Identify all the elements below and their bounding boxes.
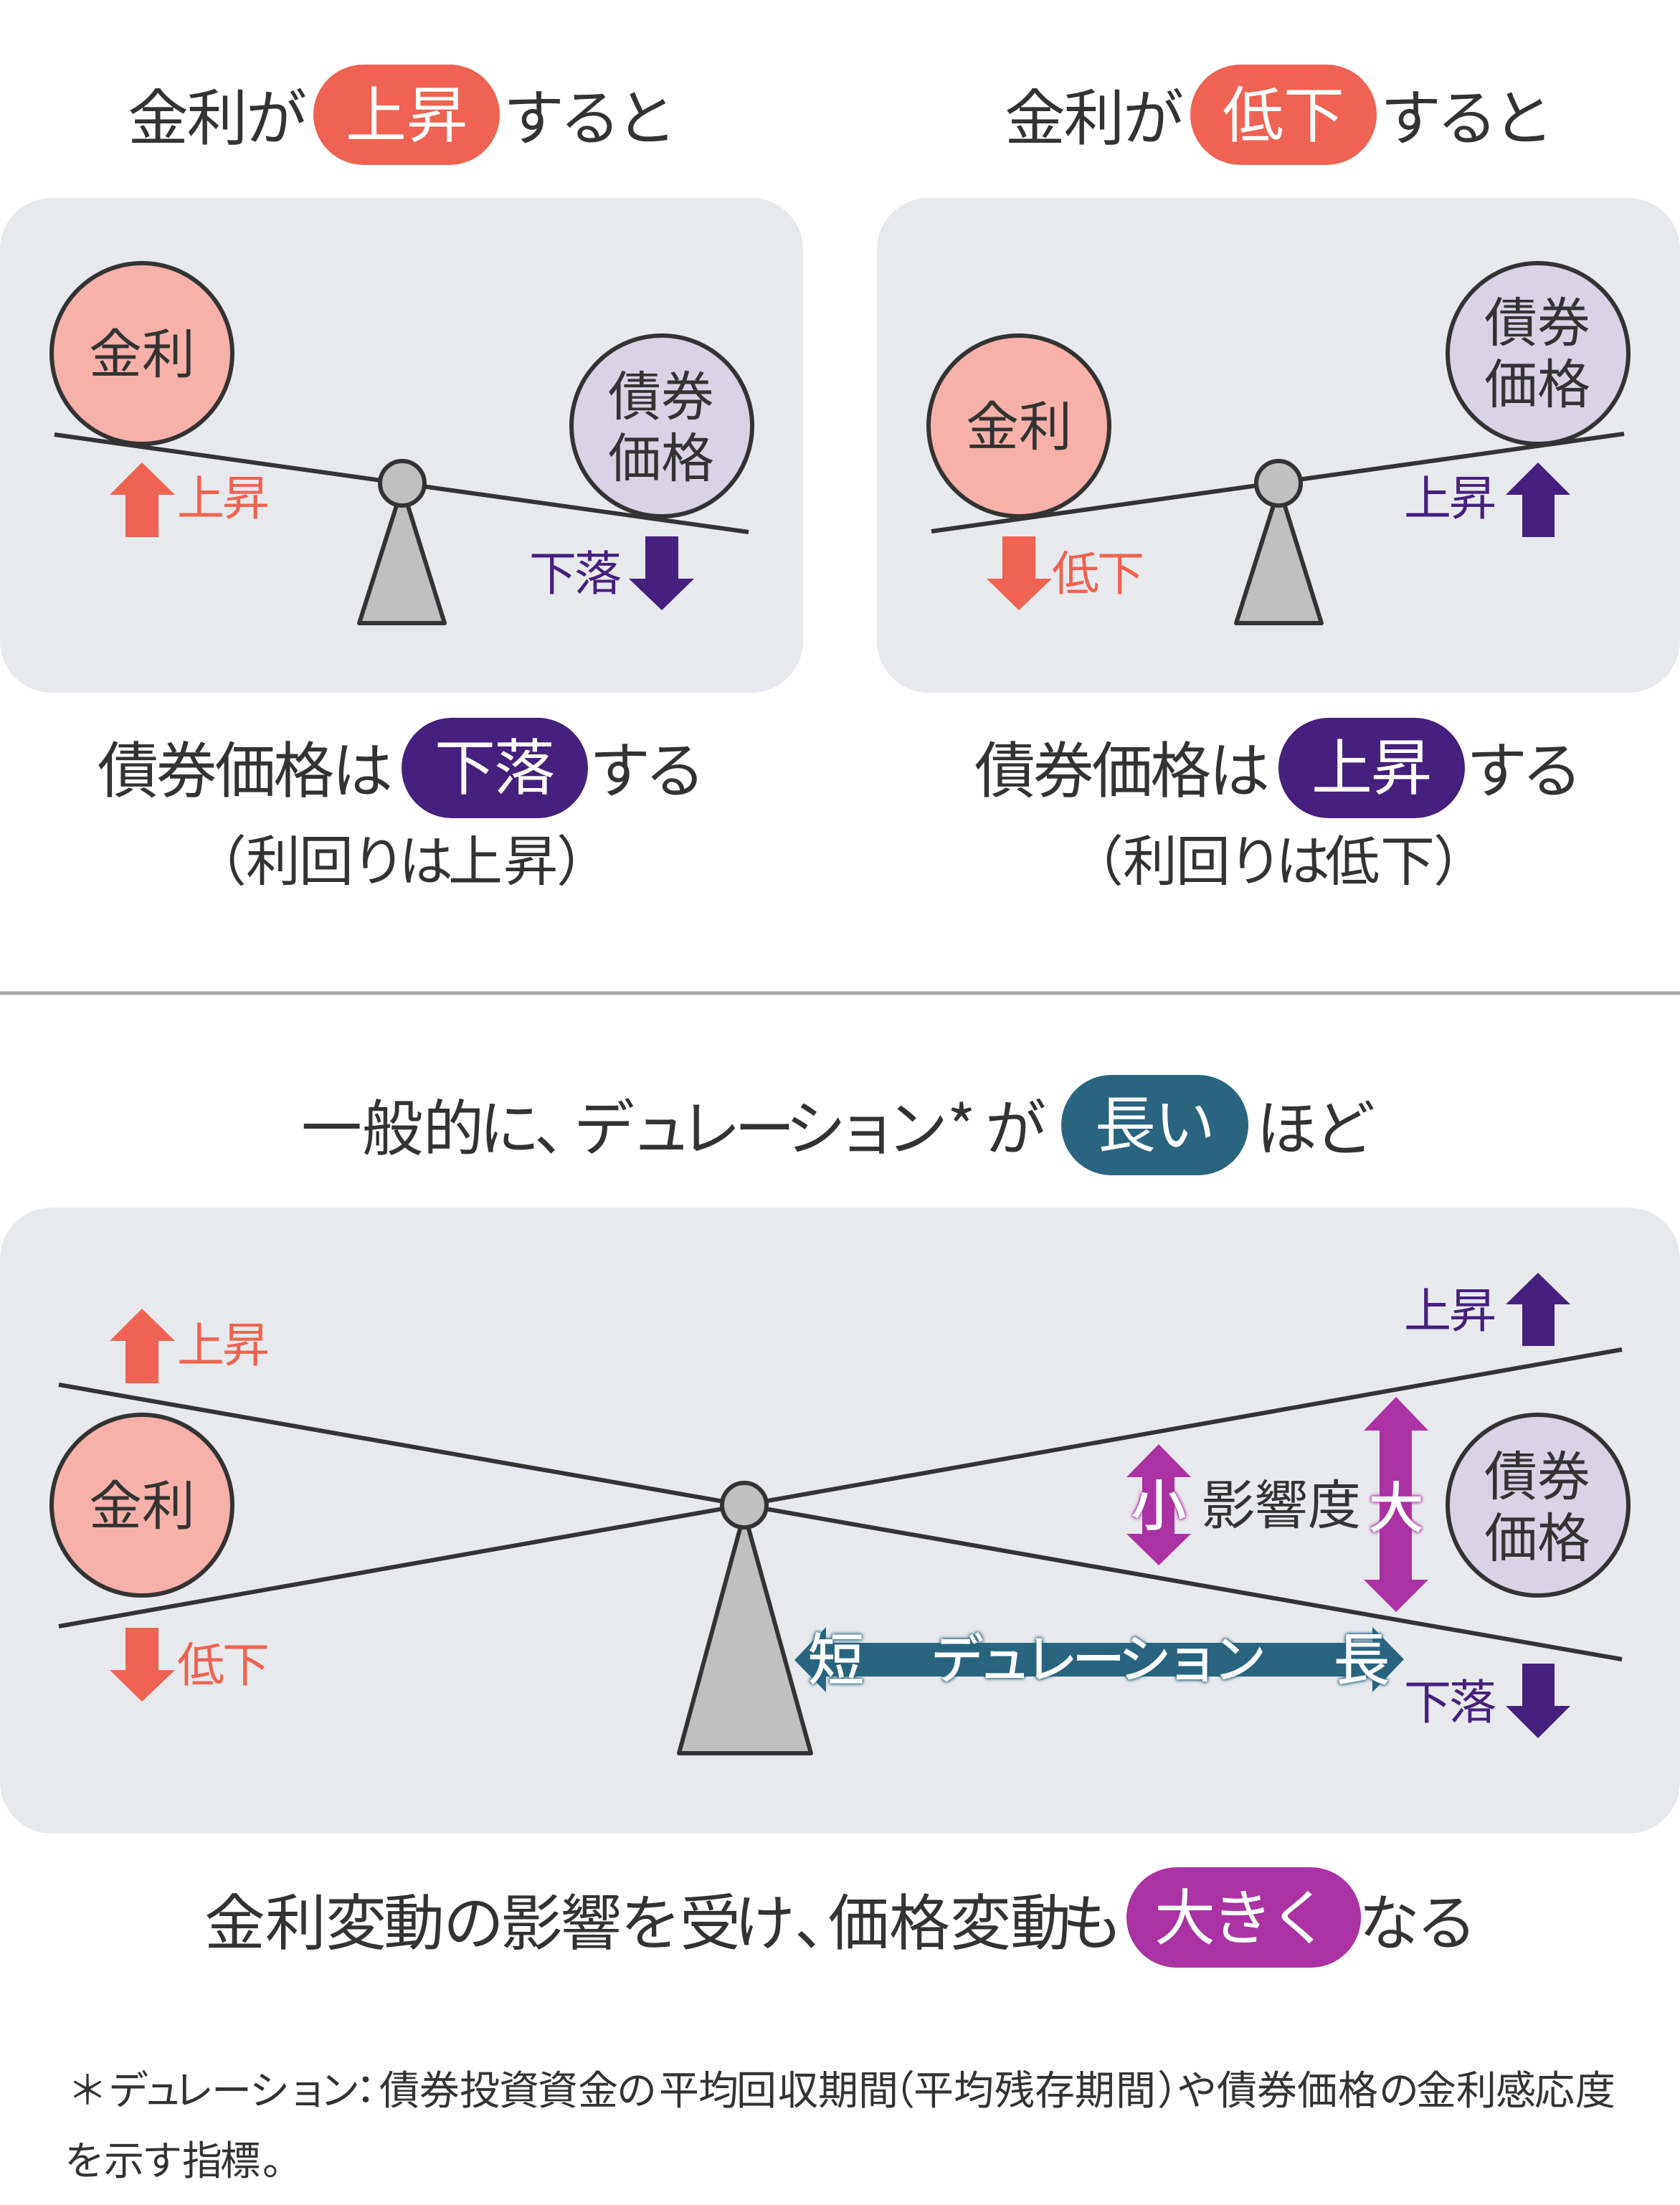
arrow: purple up bbox=[1506, 463, 1570, 537]
arrow: purple down bbox=[629, 536, 694, 610]
footnote: を示す指標。 bbox=[65, 2129, 303, 2187]
circle: bond price bbox=[1448, 263, 1628, 444]
circle: interest rate: 金利 bbox=[89, 312, 195, 389]
arrow: duration bbox=[794, 1616, 1404, 1696]
pill: rise bbox=[313, 65, 500, 165]
result: bond price rises: 債券価格は bbox=[974, 722, 1270, 810]
arrow: red down bbox=[110, 1628, 175, 1702]
note: yield rises: （利回りは上昇） bbox=[192, 817, 611, 896]
conclusion heading bbox=[204, 1867, 1477, 1968]
pill: larger bbox=[1126, 1867, 1361, 1968]
pivot bbox=[380, 461, 424, 506]
arrow: duration: デュレーション bbox=[931, 1617, 1266, 1694]
arrow: red up bbox=[110, 463, 175, 537]
circle: interest rate: 金利 bbox=[89, 1464, 195, 1540]
beam: lower-left to upper-right bbox=[59, 1350, 1622, 1626]
result: bond price rises bbox=[974, 718, 1582, 818]
circle: bond price bbox=[571, 336, 752, 516]
pill: long: 長い bbox=[1095, 1076, 1215, 1165]
pivot bbox=[1256, 461, 1301, 506]
circle: interest rate bbox=[929, 336, 1109, 516]
pill: fall: 下落 bbox=[435, 719, 555, 807]
circle: bond price: 価格 bbox=[1484, 1496, 1590, 1573]
beam bbox=[54, 435, 749, 532]
pill: rise: 上昇 bbox=[346, 67, 468, 155]
heading: rates fall: 金利が bbox=[1005, 70, 1184, 158]
pill: larger: 大きく bbox=[1154, 1869, 1330, 1958]
label: fall: 下落 bbox=[1404, 1664, 1496, 1733]
arrow: large impact: 大 bbox=[1369, 1464, 1423, 1543]
footnote: ＊デュレーション：債券投資資金の平均回収期間（平均残存期間）や債券価格の金利感応度 bbox=[67, 2059, 1615, 2117]
pill: long bbox=[1061, 1075, 1248, 1175]
heading: duration: 一般的に、デュレーション*が bbox=[301, 1080, 1046, 1168]
circle: bond price: 債券 bbox=[608, 354, 714, 431]
circle: bond price: 債券 bbox=[1484, 1434, 1590, 1511]
arrow: duration: 短 bbox=[808, 1616, 864, 1696]
arrow: purple up bbox=[1506, 1273, 1570, 1346]
circle: interest rate bbox=[52, 263, 232, 444]
circle: bond price: 価格 bbox=[1484, 342, 1590, 419]
conclusion heading: なる bbox=[1359, 1874, 1477, 1963]
arrow: red up bbox=[110, 1309, 175, 1383]
heading: rates fall: すると bbox=[1380, 70, 1554, 158]
conclusion heading: 金利変動の影響を受け、価格変動も bbox=[204, 1874, 1123, 1963]
label: fall: 低下 bbox=[1052, 536, 1144, 604]
heading: rates rise bbox=[128, 65, 677, 165]
label: rise: 上昇 bbox=[1404, 1273, 1496, 1342]
beam: upper-left to lower-right bbox=[59, 1385, 1622, 1659]
circle: interest rate: 金利 bbox=[966, 384, 1072, 461]
circle: bond price: 価格 bbox=[608, 416, 714, 493]
label: rise: 上昇 bbox=[177, 460, 270, 529]
result: bond price falls: する bbox=[589, 722, 706, 810]
beam bbox=[931, 434, 1624, 531]
triangle stand bbox=[1236, 488, 1321, 623]
triangle stand bbox=[679, 1513, 811, 1753]
circle: bond price: 債券 bbox=[1484, 280, 1590, 357]
result: bond price falls bbox=[98, 718, 706, 818]
arrow: small impact bbox=[1126, 1444, 1191, 1565]
heading: rates rise: すると bbox=[503, 70, 677, 158]
heading: duration bbox=[301, 1075, 1375, 1175]
arrow: large impact bbox=[1364, 1397, 1428, 1612]
circle: bond price bbox=[1448, 1415, 1628, 1595]
note: yield falls: （利回りは低下） bbox=[1069, 817, 1488, 896]
pill: fall bbox=[1190, 65, 1377, 165]
result: bond price falls: 債券価格は bbox=[98, 722, 393, 810]
pill: rise: 上昇 bbox=[1311, 719, 1432, 807]
pill: rise bbox=[1278, 718, 1465, 818]
label: fall: 下落 bbox=[529, 536, 622, 604]
label: rise: 上昇 bbox=[1404, 460, 1496, 529]
label: impact: 影響度 bbox=[1202, 1463, 1361, 1540]
arrow: red down bbox=[987, 536, 1052, 610]
footnote bbox=[65, 2059, 1615, 2187]
heading: rates fall bbox=[1005, 65, 1554, 165]
arrow: small impact: 小 bbox=[1131, 1462, 1186, 1541]
heading: duration: ほど bbox=[1256, 1080, 1375, 1168]
panel: rates fall seesaw bbox=[877, 198, 1680, 693]
heading: rates rise: 金利が bbox=[128, 70, 307, 158]
panel: duration seesaw bbox=[0, 1208, 1680, 1834]
result: bond price rises: する bbox=[1466, 722, 1582, 810]
arrow: duration: 長 bbox=[1334, 1616, 1390, 1696]
pivot bbox=[722, 1483, 767, 1527]
label: fall: 低下 bbox=[177, 1627, 270, 1696]
circle: interest rate bbox=[52, 1415, 232, 1595]
pill: fall: 低下 bbox=[1223, 67, 1344, 155]
panel: rates rise seesaw bbox=[0, 198, 803, 693]
arrow: purple down bbox=[1506, 1664, 1570, 1738]
pill: fall bbox=[402, 718, 588, 818]
triangle stand bbox=[359, 488, 445, 623]
label: rise: 上昇 bbox=[177, 1307, 270, 1376]
